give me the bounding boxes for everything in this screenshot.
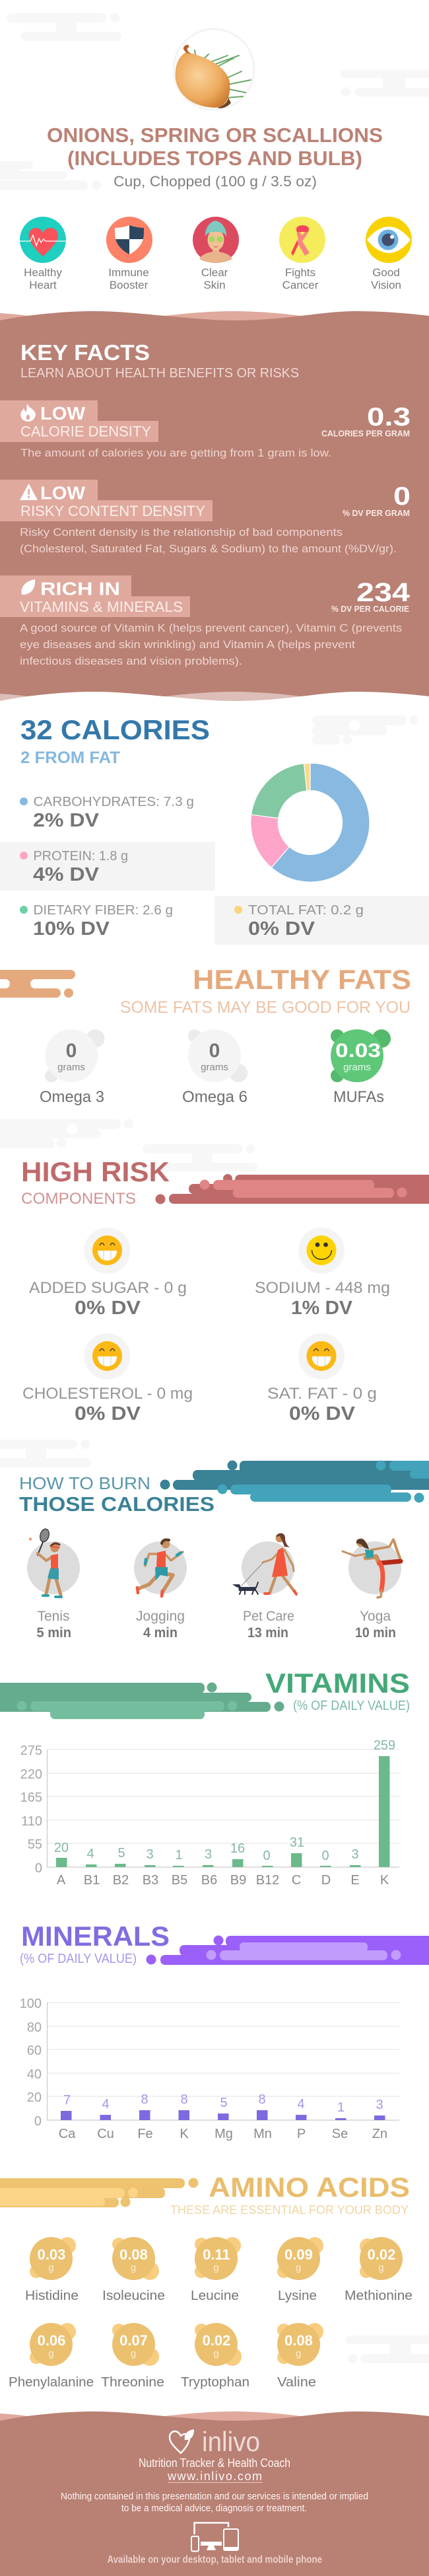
legend: dietary fiber (20, 903, 173, 939)
stat: omega 3: grams (57, 1062, 85, 1073)
bar chart: vitamins: A (57, 1873, 66, 1888)
bar chart: vitamins: D (321, 1873, 331, 1888)
item: methionine: 0.02 (368, 2246, 395, 2263)
panel: high risk components (21, 1156, 429, 1424)
bar chart: minerals: 8 (141, 2092, 148, 2107)
bar chart: minerals: Mg (214, 2127, 233, 2141)
bar chart: vitamins: 110 (21, 1814, 42, 1829)
bar chart: vitamins: 275 (20, 1744, 42, 1758)
bar chart: minerals: Cu (97, 2127, 114, 2141)
decorative blob: minerals (147, 1936, 429, 1965)
fact: rich in vitamins and minerals: VITAMINS & MINERALS (20, 599, 183, 615)
bar chart: vitamins: B9 (230, 1873, 246, 1888)
activity: yoga (343, 1538, 401, 1640)
fact: risky content density: % DV PER GRAM (343, 508, 410, 518)
bar chart: vitamins: 31 (290, 1835, 304, 1850)
legend: total fat (234, 903, 364, 939)
panel: calories (0, 714, 429, 945)
bar chart: vitamins: E (350, 1873, 360, 1888)
bar chart: vitamins: 220 (20, 1767, 42, 1782)
bar chart: minerals (20, 1997, 399, 2141)
item: cholesterol: CHOLESTEROL - 0 mg (22, 1385, 193, 1403)
bar chart: minerals: 80 (27, 2020, 42, 2035)
heading: those calories: THOSE CALORIES (19, 1492, 214, 1516)
bar chart: vitamins: B1 (84, 1873, 100, 1888)
panel: footer (0, 2411, 429, 2576)
bar chart: vitamins: 3 (146, 1847, 154, 1862)
fact: rich in vitamins and minerals: eye diseases and skin wrinkling) and Vitamin A (helps prevent (20, 638, 355, 651)
icon: fights cancer (279, 217, 325, 263)
availability note: Available on your desktop, tablet and mobile phone (107, 2554, 322, 2565)
panel: key facts (0, 311, 429, 708)
activity: tennis: Tenis (37, 1609, 70, 1624)
activity: yoga: 10 min (355, 1625, 396, 1640)
legend: protein: 4% DV (33, 864, 100, 885)
icon: healthy heart (20, 217, 66, 263)
icon: onion photo (174, 29, 254, 110)
fact: risky content density (0, 480, 411, 555)
bar chart: minerals: P (297, 2127, 306, 2141)
item: lysine: Lysine (278, 2289, 317, 2303)
bar chart: vitamins: B5 (172, 1873, 187, 1888)
bar chart: minerals: Zn (372, 2127, 387, 2141)
bar chart: minerals: 3 (376, 2098, 383, 2112)
label: good vision: Good (372, 266, 400, 279)
legend: dietary fiber: DIETARY FIBER: 2.6 g (33, 903, 173, 918)
icon: immune booster (106, 217, 152, 263)
item: threonine: g (131, 2348, 136, 2359)
item: histidine: 0.03 (38, 2246, 65, 2263)
item: isoleucine: 0.08 (119, 2246, 148, 2263)
item: tryptophan (181, 2323, 249, 2390)
bar chart: minerals: 7 (63, 2093, 71, 2108)
item: phenylalanine: 0.06 (38, 2332, 65, 2349)
fact: rich in vitamins and minerals (0, 575, 411, 667)
item: threonine: 0.07 (119, 2332, 148, 2349)
item: methionine (345, 2237, 412, 2303)
bar chart: vitamins: 259 (374, 1738, 395, 1753)
bar chart: vitamins: 55 (28, 1837, 42, 1852)
heading: minerals: MINERALS (21, 1921, 170, 1952)
item: leucine: 0.11 (203, 2246, 230, 2263)
label: clear skin: Skin (203, 279, 226, 291)
item: valine: Valine (277, 2375, 316, 2390)
tagline: Nutrition Tracker & Health Coach (139, 2456, 290, 2470)
fact: risky content density: 0 (393, 482, 411, 511)
activity: jogging: Jogging (136, 1609, 185, 1624)
donut chart: macronutrients (251, 763, 370, 882)
activity: yoga: Yoga (360, 1609, 391, 1624)
panel: how to burn those calories (19, 1460, 429, 1640)
icon: devices (191, 2522, 238, 2552)
title: (INCLUDES TOPS AND BULB) (67, 147, 362, 170)
item: isoleucine (102, 2237, 165, 2303)
bar chart: minerals: 5 (220, 2096, 228, 2110)
icon: yoga pose (343, 1538, 401, 1598)
bar chart: vitamins: 20 (54, 1841, 69, 1855)
item: histidine: Histidine (25, 2289, 79, 2303)
bar chart: vitamins: 3 (205, 1847, 212, 1862)
subheading: percent of daily value: (% OF DAILY VALUE) (20, 1952, 137, 1966)
heading: key facts: KEY FACTS (20, 340, 150, 365)
legend: protein (20, 849, 128, 885)
item: phenylalanine: g (48, 2348, 54, 2359)
fact: rich in vitamins and minerals: infectious diseases and vision problems). (20, 655, 242, 667)
icon: flame (20, 404, 36, 422)
subheading: amino acids: THESE ARE ESSENTIAL FOR YOUR BODY (170, 2203, 409, 2217)
fact: rich in vitamins and minerals: 234 (356, 578, 411, 607)
legend: carbohydrates: CARBOHYDRATES: 7.3 g (33, 795, 194, 809)
item: valine: 0.08 (284, 2332, 313, 2349)
subheading: healthy fats: SOME FATS MAY BE GOOD FOR YOU (120, 998, 411, 1017)
item: tryptophan: 0.02 (203, 2332, 230, 2349)
item: saturated fat (267, 1333, 377, 1424)
title (47, 124, 383, 170)
fact: calorie density: CALORIE DENSITY (20, 423, 151, 440)
item: methionine: Methionine (345, 2289, 412, 2303)
item: valine: g (296, 2348, 301, 2359)
bar chart: minerals: K (180, 2127, 189, 2141)
subheading: percent of daily value: (% OF DAILY VALUE) (293, 1699, 410, 1713)
decorative blob: vitamins (0, 1682, 284, 1719)
item: histidine: g (48, 2262, 54, 2273)
bar chart: minerals: Mn (253, 2127, 272, 2141)
bar chart: minerals: 60 (27, 2043, 42, 2058)
item: leucine: Leucine (191, 2289, 239, 2303)
bar chart: vitamins: 5 (117, 1846, 125, 1860)
bar chart: minerals: Fe (137, 2127, 153, 2141)
website link: www.inlivo.com (167, 2470, 262, 2483)
bar chart: minerals: 40 (27, 2067, 42, 2082)
heading: how to burn: HOW TO BURN (19, 1473, 150, 1493)
stat: mufas (331, 1029, 391, 1106)
bar chart: vitamins: 16 (230, 1841, 245, 1856)
panel: amino acids (0, 2172, 412, 2390)
panel: vitamins (0, 1668, 410, 1888)
item: lysine: 0.09 (284, 2246, 313, 2263)
label: good vision: Vision (371, 279, 401, 291)
fact: rich in vitamins and minerals: RICH IN (40, 579, 120, 599)
bar chart: vitamins: 0 (35, 1861, 42, 1876)
icon: jogger (137, 1539, 183, 1596)
bar chart: vitamins: B12 (256, 1873, 279, 1888)
fact: calorie density: CALORIES PER GRAM (321, 428, 410, 439)
stat: omega 6 (182, 1029, 248, 1106)
subheading: components: COMPONENTS (21, 1190, 136, 1208)
item: added sugar (29, 1228, 187, 1319)
stat: omega 3: 0 (66, 1040, 77, 1062)
item: saturated fat: 0% DV (289, 1403, 356, 1424)
item: threonine: Threonine (101, 2375, 164, 2390)
item: phenylalanine: Phenylalanine (9, 2375, 94, 2390)
item: tryptophan: Tryptophan (181, 2375, 249, 2390)
activity: pet care: 13 min (248, 1625, 288, 1640)
legend: total fat: 0% DV (248, 918, 315, 939)
decorative blob: healthy fats (0, 970, 75, 998)
bar chart: minerals: 4 (102, 2097, 110, 2112)
heading: high risk: HIGH RISK (21, 1156, 170, 1187)
bar chart: minerals: 100 (20, 1997, 42, 2011)
bar chart: minerals: 0 (34, 2114, 42, 2129)
item: lysine: g (296, 2262, 301, 2273)
item: saturated fat: SAT. FAT - 0 g (267, 1385, 377, 1403)
legend: total fat: TOTAL FAT: 0.2 g (248, 903, 364, 918)
item: leucine: g (213, 2262, 219, 2273)
stat: omega 3 (40, 1029, 104, 1106)
bar chart: minerals: 1 (337, 2100, 345, 2115)
icon: good vision (366, 217, 412, 263)
panel: healthy fats (0, 964, 411, 1106)
heading: vitamins: VITAMINS (265, 1668, 410, 1699)
icon: leaf (21, 579, 35, 595)
bar chart: vitamins (20, 1738, 399, 1888)
decorative blob: amino acids (0, 2178, 198, 2207)
bar chart: vitamins: B6 (201, 1873, 217, 1888)
bar chart: minerals: 20 (27, 2090, 42, 2105)
serving size subtitle: Cup, Chopped (100 g / 3.5 oz) (114, 173, 317, 190)
disclaimer: Nothing contained in this presentation and our services is intended or implied (61, 2491, 368, 2502)
bar chart: vitamins: K (380, 1873, 389, 1888)
activity: pet care (232, 1533, 296, 1640)
label: immune booster: Immune (108, 266, 149, 279)
fact: calorie density: LOW (40, 403, 86, 423)
stat: mufas: grams (343, 1062, 371, 1073)
item: cholesterol: 0% DV (75, 1403, 141, 1424)
activity: jogging: 4 min (143, 1625, 178, 1640)
fact: rich in vitamins and minerals: % DV PER CALORIE (331, 604, 409, 614)
item: cholesterol (22, 1333, 193, 1424)
activity: pet care: Pet Care (243, 1609, 294, 1624)
icon: warning triangle (20, 484, 38, 500)
label: clear skin: Clear (201, 266, 228, 279)
stat: omega 6: Omega 6 (182, 1088, 248, 1106)
item: leucine (191, 2237, 241, 2303)
bar chart: minerals: 8 (258, 2092, 266, 2107)
bar chart: minerals: Ca (59, 2127, 76, 2141)
item: sodium (255, 1228, 390, 1319)
heading: calories: 32 CALORIES (20, 714, 210, 745)
heading: amino acids: AMINO ACIDS (209, 2172, 410, 2203)
activity: jogging (134, 1539, 187, 1640)
bar chart: vitamins: 0 (321, 1849, 329, 1863)
bar chart: vitamins: B3 (143, 1873, 158, 1888)
item: lysine (277, 2237, 323, 2303)
bar chart: minerals: Se (332, 2127, 348, 2141)
stat: mufas: 0.03 (335, 1040, 381, 1062)
bar chart: vitamins: 4 (86, 1847, 94, 1861)
icon: woman walking dog (232, 1533, 296, 1594)
bar chart: vitamins: 165 (20, 1790, 42, 1805)
item: added sugar: ADDED SUGAR - 0 g (29, 1279, 187, 1297)
fact: risky content density: Risky Content density is the relationship of bad components (20, 526, 343, 538)
item: histidine (25, 2237, 79, 2303)
stat: omega 6: grams (201, 1062, 228, 1073)
stat: omega 6: 0 (209, 1040, 220, 1062)
bar chart: vitamins: B2 (113, 1873, 129, 1888)
fact: calorie density: The amount of calories you are getting from 1 gram is low. (20, 447, 331, 459)
activity: tennis: 5 min (37, 1625, 71, 1640)
item: sodium: SODIUM - 448 mg (255, 1279, 390, 1297)
bar chart: vitamins: C (292, 1873, 301, 1888)
legend: protein: PROTEIN: 1.8 g (33, 849, 128, 864)
title: ONIONS, SPRING OR SCALLIONS (47, 124, 383, 147)
bar chart: minerals: 8 (180, 2092, 188, 2107)
activity: tennis (27, 1528, 80, 1640)
bar chart: vitamins: 0 (263, 1849, 271, 1863)
item: isoleucine: g (131, 2262, 136, 2273)
item: sodium: 1% DV (291, 1298, 353, 1319)
item: valine (277, 2323, 323, 2390)
fact: rich in vitamins and minerals: A good source of Vitamin K (helps prevent cancer), Vitamin C (prevents (20, 622, 402, 634)
decorative blob: high risk (156, 1174, 429, 1204)
fact: calorie density (0, 400, 411, 459)
label: healthy heart: Heart (29, 279, 57, 291)
stat: mufas: MUFAs (333, 1088, 384, 1106)
icon: clear skin (193, 217, 239, 263)
item: phenylalanine (9, 2323, 94, 2390)
item: added sugar: 0% DV (75, 1298, 141, 1319)
label: fights cancer: Fights (285, 266, 315, 279)
logo: inlivo: inlivo (202, 2426, 260, 2457)
label: fights cancer: Cancer (282, 279, 319, 291)
legend: carbohydrates (20, 795, 194, 831)
bar chart: minerals: 4 (297, 2097, 305, 2112)
label: immune booster: Booster (110, 279, 148, 291)
item: isoleucine: Isoleucine (102, 2289, 165, 2303)
heading: healthy fats: HEALTHY FATS (193, 964, 411, 995)
bar chart: vitamins: 3 (351, 1847, 359, 1862)
icon: tennis player (29, 1528, 61, 1597)
panel: minerals (20, 1921, 429, 2141)
fact: risky content density: LOW (40, 482, 86, 503)
disclaimer: to be a medical advice, diagnosis or treatment. (121, 2503, 307, 2514)
item: threonine (101, 2323, 164, 2390)
fact: calorie density: 0.3 (367, 403, 411, 431)
disclaimer (61, 2491, 368, 2514)
fact: risky content density: (Cholesterol, Saturated Fat, Sugars & Sodium) to the amount (%DV/gr). (20, 542, 397, 555)
item: tryptophan: g (213, 2348, 219, 2359)
subheading: key facts: LEARN ABOUT HEALTH BENEFITS OR RISKS (20, 366, 299, 381)
item: methionine: g (378, 2262, 384, 2273)
stat: omega 3: Omega 3 (40, 1088, 104, 1106)
label: healthy heart: Healthy (24, 266, 62, 279)
legend: dietary fiber: 10% DV (33, 918, 110, 939)
bar chart: vitamins: 1 (175, 1848, 183, 1862)
decorative blob: burn calories (160, 1460, 429, 1502)
logo: inlivo (170, 2426, 260, 2457)
panel: health benefits (20, 217, 412, 291)
fact: risky content density: RISKY CONTENT DENSITY (20, 503, 205, 519)
subheading: from fat: 2 FROM FAT (20, 749, 120, 767)
legend: carbohydrates: 2% DV (33, 810, 100, 831)
